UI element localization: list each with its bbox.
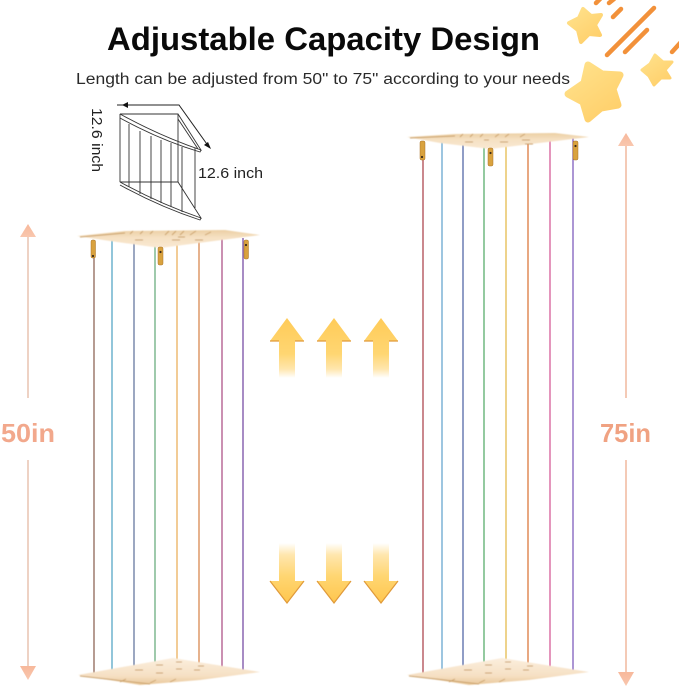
strings <box>423 138 573 678</box>
down arrow 1 <box>270 543 304 603</box>
label: width: 12.6 inch <box>198 166 263 182</box>
label: 75in: 75in <box>600 418 651 448</box>
star: large <box>568 65 620 119</box>
top shelf outline <box>120 114 201 152</box>
label: depth: 12.6 inch <box>88 108 104 172</box>
brackets <box>91 240 248 265</box>
short organizer: 50 inch <box>77 230 260 685</box>
dimension arrows <box>117 105 209 147</box>
right measurement arrow <box>618 133 634 686</box>
dimension line drawing <box>117 102 211 220</box>
title: Adjustable Capacity Design <box>107 21 540 57</box>
up arrows <box>270 318 398 378</box>
top shelf <box>407 133 589 149</box>
bottom shelf outline <box>120 182 201 220</box>
down arrow 3 <box>364 543 398 603</box>
down arrows <box>270 543 398 603</box>
tall organizer: 75 inch <box>407 133 589 685</box>
subtitle: Length can be adjusted from 50" to 75" according to your needs <box>76 71 570 88</box>
uprights <box>120 114 195 212</box>
bottom shelf <box>407 658 589 685</box>
bottom shelf <box>78 658 260 685</box>
down arrow 2 <box>317 543 351 603</box>
label: 50in: 50in <box>1 418 55 448</box>
strings <box>94 238 243 678</box>
left measurement arrow <box>20 224 36 680</box>
up arrow 3 <box>364 318 398 378</box>
up arrow 2 <box>317 318 351 378</box>
star: upper <box>569 9 601 42</box>
decorative stars and streaks <box>568 0 679 119</box>
brackets <box>420 141 578 166</box>
star: small <box>642 55 672 85</box>
top shelf <box>77 230 260 248</box>
orange streaks <box>596 0 679 55</box>
up arrow 1 <box>270 318 304 378</box>
